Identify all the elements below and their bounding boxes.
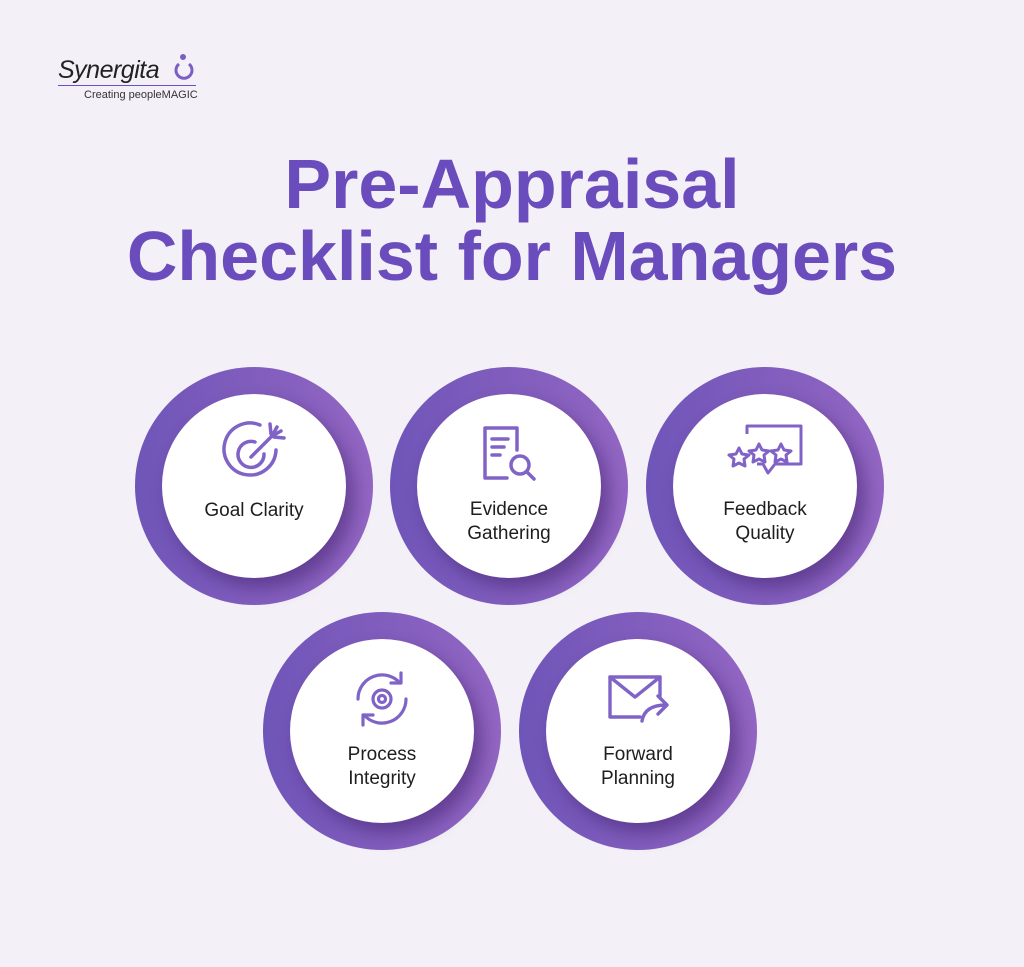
- label: [723, 499, 807, 544]
- circle: Goal Clarity: [135, 367, 373, 605]
- logo: Creating peopleMAGIC: [84, 89, 198, 101]
- icon: mail forward: [608, 675, 669, 723]
- title: Checklist for Managers: [127, 217, 897, 295]
- circle: Feedback Quality: [646, 367, 884, 605]
- label: Goal Clarity: [204, 500, 304, 521]
- label: Integrity: [348, 768, 416, 789]
- icon: star rating bubble: [727, 424, 802, 475]
- label: Evidence: [470, 499, 548, 520]
- label: [467, 499, 551, 544]
- label: Quality: [735, 523, 795, 544]
- logo: Synergita: [58, 56, 159, 84]
- title: [127, 145, 897, 295]
- label: Gathering: [467, 523, 551, 544]
- label: Planning: [601, 768, 675, 789]
- label: [601, 744, 675, 789]
- title: Pre-Appraisal: [284, 145, 740, 223]
- icon: document search: [483, 426, 536, 481]
- logo: [58, 54, 198, 101]
- label: Feedback: [723, 499, 807, 520]
- label: [348, 744, 416, 789]
- circle: Process Integrity: [263, 612, 501, 850]
- icon: gear cycle: [356, 671, 408, 727]
- label: Forward: [603, 744, 673, 765]
- label: Process: [348, 744, 416, 765]
- circle: Forward Planning: [519, 612, 757, 850]
- icon: target: [222, 421, 286, 477]
- circle: Evidence Gathering: [390, 367, 628, 605]
